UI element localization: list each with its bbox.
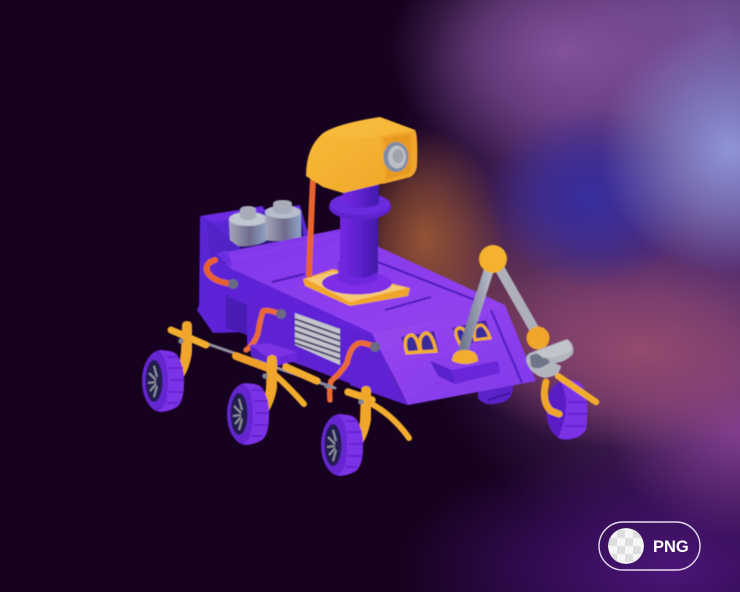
suspension arm: axle and rods [171, 330, 409, 438]
rover body: front panel [372, 305, 536, 405]
orange cable to camera [309, 179, 313, 277]
front vents with yellow tubes [401, 320, 492, 354]
small top-mounted side box [250, 343, 297, 368]
robotic arm [430, 245, 550, 384]
rover body: lower side recess [226, 295, 247, 335]
side hoses [207, 260, 375, 400]
camera base plate [303, 262, 410, 306]
rear storage box [199, 205, 310, 312]
rear wheel behind the body [478, 384, 513, 404]
PNG badge [599, 522, 700, 570]
side louvre grille [295, 313, 340, 365]
badge outline [599, 522, 700, 570]
suspension uprights [180, 321, 371, 444]
front-right wheel [546, 380, 587, 440]
wheel 1 [142, 350, 184, 412]
rover body: side face [197, 260, 407, 405]
front wheel fork [544, 376, 596, 414]
rover illustration [142, 117, 596, 476]
arm gripper [526, 339, 573, 378]
suspension bolts [178, 338, 364, 405]
rover body: side block [247, 300, 408, 405]
badge label: PNG [653, 538, 689, 556]
camera mast [329, 185, 391, 278]
wheel 2 [227, 383, 269, 445]
camera head [306, 117, 417, 193]
rover body: top deck [217, 229, 505, 333]
transparency checker circle [608, 528, 644, 564]
wheel 3 [321, 414, 363, 476]
battery canisters [229, 200, 301, 246]
hose mounts [228, 279, 380, 352]
